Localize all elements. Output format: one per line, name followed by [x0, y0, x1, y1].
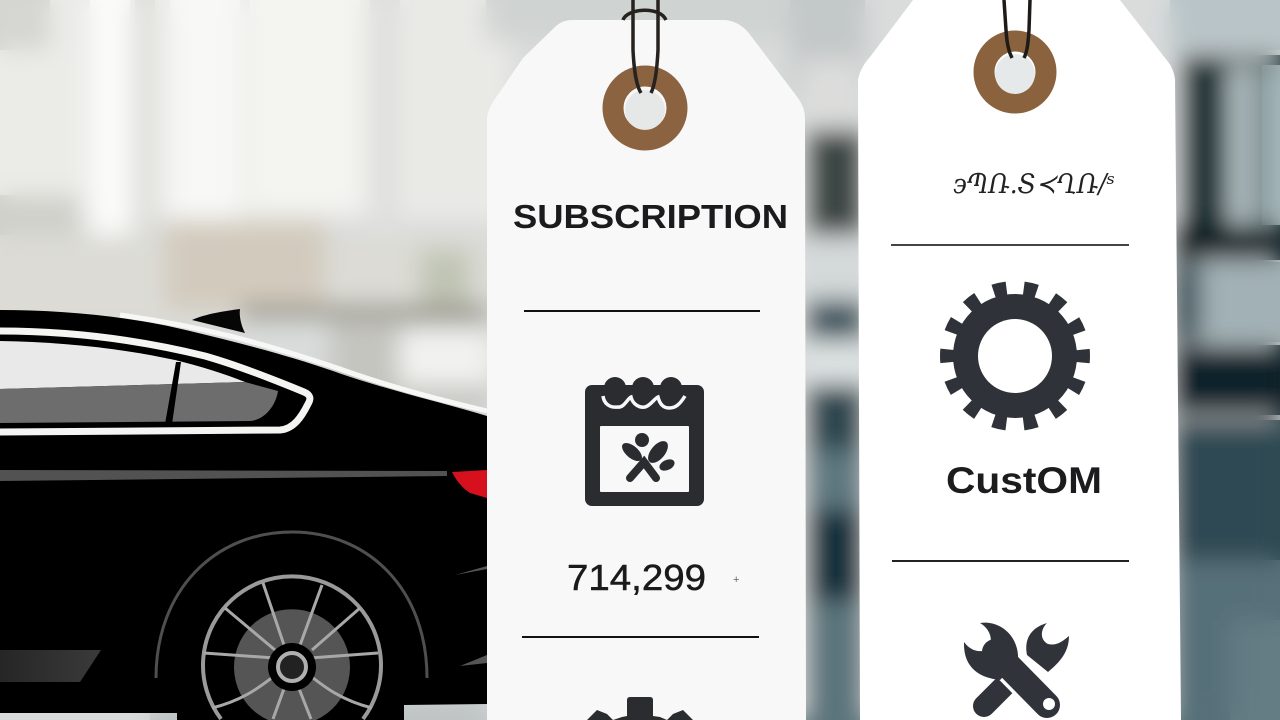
window trim	[0, 331, 310, 432]
bumper slits	[455, 566, 487, 666]
eyelet	[984, 41, 1046, 103]
heading: CustOM	[946, 460, 1102, 501]
garbled label: ϶ՊՌ.Տ≺ՂՌ/ˢ	[953, 169, 1115, 200]
tag card	[487, 20, 806, 720]
wheel arch	[156, 532, 427, 678]
roofline highlight	[120, 315, 487, 411]
price tag: custom	[858, 0, 1181, 720]
roof fin	[192, 309, 245, 333]
icon: calendar	[585, 377, 704, 506]
string	[623, 0, 666, 93]
tag card	[858, 0, 1181, 720]
icon: gear cut off	[587, 697, 693, 720]
eyelet	[613, 76, 677, 140]
price: 714,299	[567, 557, 706, 598]
string	[1004, 0, 1030, 58]
side sill panel	[0, 650, 101, 682]
icon: gear	[948, 289, 1082, 423]
window glass upper	[0, 341, 245, 389]
car silhouette	[0, 309, 487, 720]
wheel	[203, 576, 381, 720]
tail light	[452, 470, 487, 498]
heading: SUBSCRIPTION	[513, 198, 788, 235]
price marks: +	[733, 574, 739, 586]
price tag: subscription	[487, 0, 806, 720]
window glass lower	[0, 382, 278, 423]
car body	[0, 310, 487, 720]
window pillar	[165, 362, 181, 424]
icon: wrench and spanner	[964, 623, 1069, 710]
belt line stripe	[0, 470, 447, 481]
